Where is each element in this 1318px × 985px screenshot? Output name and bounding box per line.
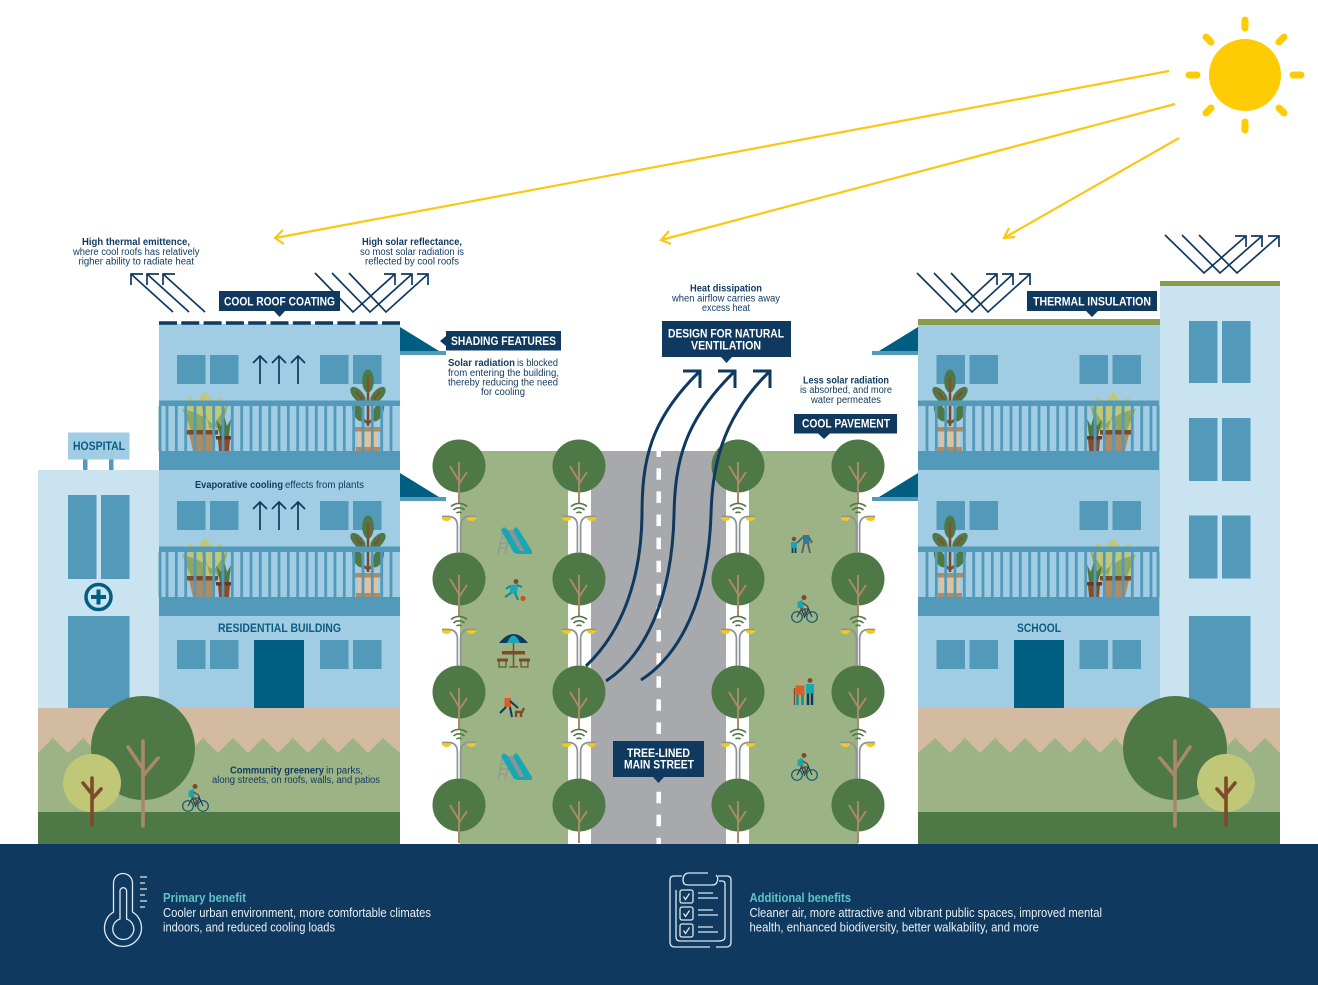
label: thermal insulation [1027, 291, 1157, 317]
shading awning [400, 473, 446, 501]
icon: adult with child [791, 529, 812, 553]
community greenery text: Community greenery [230, 766, 324, 776]
primary benefit text [163, 891, 431, 934]
arrows: natural ventilation airflow [586, 371, 770, 681]
building name: RESIDENTIAL BUILDING [218, 623, 341, 635]
icon: hospital cross [86, 584, 111, 610]
shading awning [400, 327, 446, 355]
cool roof dashes [159, 321, 400, 325]
caption: high solar reflectance [360, 237, 464, 268]
left ground and greenery [38, 696, 400, 844]
evaporative cooling text [195, 480, 364, 491]
label: cool roof coating [219, 291, 340, 317]
icon: picnic table [497, 634, 530, 667]
right ground and greenery [918, 696, 1280, 844]
park activities, left [497, 527, 532, 780]
label: design for natural ventilation: VENTILATION [691, 340, 761, 352]
shading awning [872, 327, 918, 355]
street trees, column 2 [552, 440, 606, 843]
icon: cyclist [792, 595, 817, 622]
arrows: reflectance, school roof [917, 273, 1030, 312]
school building, tall wing [1160, 281, 1280, 708]
middle floor [918, 501, 1159, 616]
label: cool roof coating: COOL ROOF COATING [224, 296, 335, 308]
caption: solar radiation: for cooling [481, 387, 525, 398]
park activities, right [791, 529, 817, 780]
caption: less solar radiation [800, 376, 892, 406]
caption: high thermal emittence: where cool roofs has relatively [72, 247, 200, 258]
icon: clipboard checklist [670, 873, 731, 947]
community greenery text [212, 766, 380, 786]
small tree [63, 754, 121, 825]
icon: thermometer [104, 874, 147, 946]
community greenery text: along streets, on roofs, walls, and patios [212, 775, 380, 786]
street trees, column 3 [712, 440, 764, 843]
caption: solar radiation [448, 358, 559, 398]
label: shading features: SHADING FEATURES [451, 336, 556, 348]
shading awning [872, 473, 918, 501]
label: shading features [440, 331, 561, 350]
caption: solar radiation: thereby reducing the need [448, 378, 558, 388]
large tree [91, 696, 195, 826]
upper floor [159, 355, 400, 470]
caption: heat dissipation: Heat dissipation [690, 284, 762, 294]
door [254, 640, 304, 708]
ground floor windows [936, 640, 1141, 669]
additional benefits text [750, 891, 1102, 934]
caption: heat dissipation [671, 284, 780, 314]
cyclist [183, 784, 208, 811]
caption: high thermal emittence: High thermal emittence, [82, 237, 190, 248]
residential building [159, 323, 400, 708]
caption: less solar radiation: is absorbed, and more [800, 385, 892, 396]
upward arrows [253, 502, 305, 530]
right park strip [749, 451, 858, 844]
icon: slide [498, 753, 532, 780]
left park strip [460, 451, 568, 844]
caption: heat dissipation: excess heat [702, 303, 750, 314]
caption: less solar radiation: water permeates [810, 395, 881, 406]
small tree [1197, 754, 1255, 825]
additional benefits text: Additional benefits [750, 891, 851, 905]
icon: person walking dog [500, 692, 524, 717]
building name: SCHOOL [1017, 623, 1061, 635]
arrows: thermal emittence [131, 274, 205, 312]
caption: solar radiation: is blocked [517, 358, 558, 369]
icon: two older people [794, 678, 814, 705]
caption: high solar reflectance: so most solar radiation is [360, 247, 464, 258]
hospital sign [68, 432, 130, 470]
label: tree-lined main street [613, 741, 704, 783]
primary benefit text: Cooler urban environment, more comfortable climates [163, 906, 431, 920]
large tree [1123, 696, 1227, 826]
caption: high solar reflectance: High solar reflectance, [362, 237, 462, 248]
arrows: reflectance, school tall wing [1165, 235, 1279, 273]
hospital building [38, 432, 159, 708]
footer band [0, 844, 1318, 985]
street trees, column 1 [432, 440, 486, 843]
label: cool pavement: COOL PAVEMENT [802, 418, 890, 430]
caption: high solar reflectance: reflected by cool roofs [365, 256, 459, 268]
caption: solar radiation: from entering the building, [448, 368, 559, 379]
evaporative cooling text: Evaporative cooling [195, 480, 283, 491]
label: tree-lined main street: MAIN STREET [624, 760, 694, 772]
arrows: solar reflectance, residential roof [315, 273, 428, 312]
caption: solar radiation: Solar radiation [448, 358, 515, 369]
school building, main wing [918, 319, 1160, 708]
additional benefits text: Cleaner air, more attractive and vibrant public spaces, improved mental [750, 906, 1102, 920]
ground floor windows [177, 640, 382, 669]
caption: heat dissipation: when airflow carries away [671, 294, 780, 304]
icon: sun [1189, 20, 1301, 130]
primary benefit text: indoors, and reduced cooling loads [163, 920, 335, 934]
caption: less solar radiation: Less solar radiation [803, 376, 889, 386]
icon: cyclist [792, 753, 817, 780]
icon: slide [498, 527, 532, 554]
label: tree-lined main street: TREE-LINED [627, 748, 690, 760]
middle floor [159, 501, 400, 616]
door [1014, 640, 1064, 708]
primary benefit text: Primary benefit [163, 891, 247, 905]
caption: high thermal emittence: righer ability to radiate heat [78, 256, 194, 268]
label: design for natural ventilation [662, 321, 791, 363]
upper floor [918, 355, 1159, 470]
community greenery text: in parks, [326, 766, 363, 776]
label: thermal insulation: THERMAL INSULATION [1033, 296, 1151, 308]
arrows: incoming solar radiation [275, 71, 1179, 244]
evaporative cooling text: effects from plants [285, 480, 364, 491]
hospital sign: HOSPITAL [73, 441, 125, 453]
additional benefits text: health, enhanced biodiversity, better walkability, and more [750, 920, 1039, 934]
icon: soccer player [505, 579, 526, 601]
label: design for natural ventilation: DESIGN FOR NATURAL [668, 328, 784, 340]
main street road [591, 451, 726, 844]
upward arrows [253, 356, 305, 384]
label: cool pavement [794, 414, 897, 439]
street trees, column 4 [832, 440, 884, 843]
caption: high thermal emittence [72, 237, 200, 268]
